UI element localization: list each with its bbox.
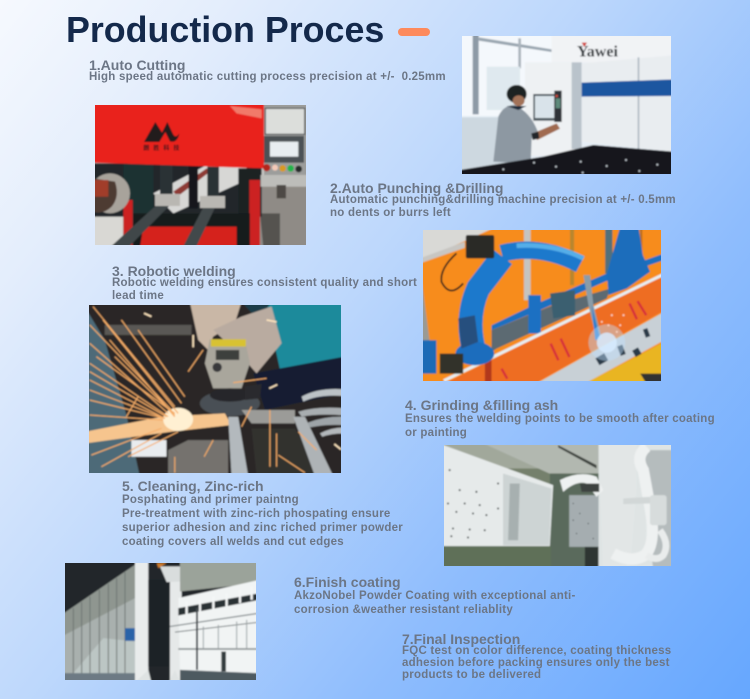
photo: angle grinder with sparks (89, 305, 341, 473)
step 2 text: 2.Auto Punching &Drilling (330, 180, 503, 196)
step 3 text (112, 263, 417, 302)
step 1 text: 1.Auto Cutting (89, 57, 185, 73)
orange accent bar (398, 28, 430, 36)
step 3 text: 3. Robotic welding (112, 263, 236, 279)
photo: laser cutting machine and operator (462, 36, 671, 174)
photo: powder coating spray robot (444, 445, 671, 566)
step 4 text: 4. Grinding &filling ash (405, 397, 558, 413)
photo: red auto cutting machine: 朗胜科技 (143, 143, 179, 152)
step 6 text: AkzoNobel Powder Coating with exceptional anti- (294, 590, 576, 602)
step 6 text (294, 574, 576, 616)
step 7 text: 7.Final Inspection (402, 631, 520, 647)
step 1 text (89, 57, 446, 83)
step 5 text: Posphating and primer paintng (122, 494, 299, 506)
step 7 text: FQC test on color difference, coating thickness (402, 645, 671, 657)
step 7 text: products to be delivered (402, 669, 541, 681)
step 4 text: Ensures the welding points to be smooth after coating (405, 413, 715, 425)
step 5 text: coating covers all welds and cut edges (122, 536, 344, 548)
photo: finish coating line (65, 563, 256, 680)
step 5 text (122, 478, 403, 548)
step 3 text: lead time (112, 290, 164, 302)
photo: red auto cutting machine (95, 105, 306, 245)
step 4 text (405, 397, 715, 439)
step 7 text: adhesion before packing ensures only the best (402, 657, 670, 669)
photo: blue robotic welding arm (423, 230, 661, 381)
photo: laser cutting machine and operator: Yawei (577, 44, 618, 61)
step 2 text: Automatic punching&drilling machine precision at +/- 0.5mm (330, 194, 676, 206)
step 5 text: Pre-treatment with zinc-rich phospating ensure (122, 508, 391, 520)
step 2 text: no dents or burrs left (330, 206, 451, 218)
title: Production Proces (66, 10, 384, 50)
step 1 text: High speed automatic cutting process precision at +/- 0.25mm (89, 71, 446, 83)
step 4 text: or painting (405, 427, 467, 439)
step 5 text: superior adhesion and zinc riched primer powder (122, 522, 403, 534)
step 6 text: corrosion &weather resistant reliablity (294, 604, 513, 616)
step 5 text: 5. Cleaning, Zinc-rich (122, 478, 264, 494)
step 6 text: 6.Finish coating (294, 574, 401, 590)
step 3 text: Robotic welding ensures consistent quality and short (112, 277, 417, 289)
step 2 text (330, 180, 676, 218)
step 7 text (402, 631, 671, 681)
